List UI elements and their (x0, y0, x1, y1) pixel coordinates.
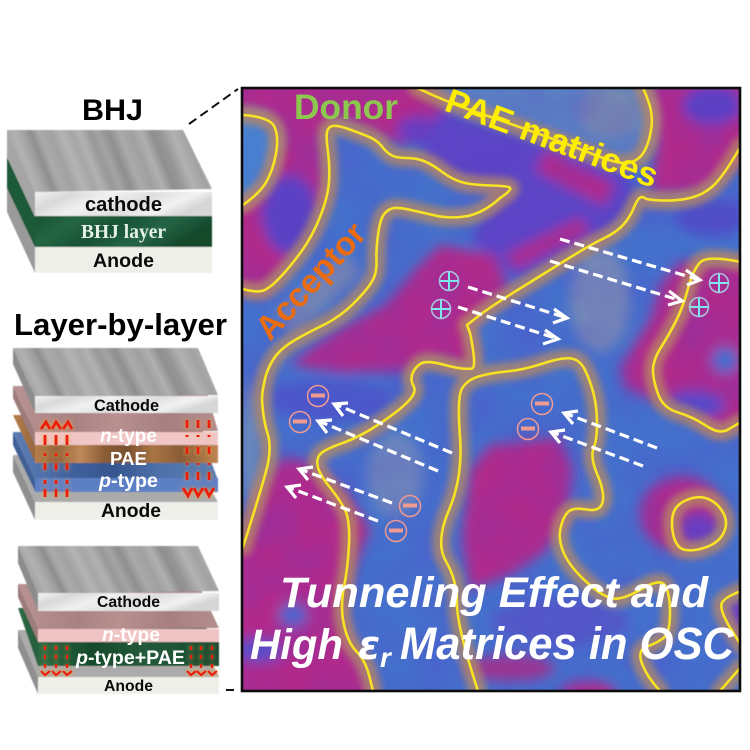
title: Tunneling Effect and High εr Matrices in OSC: Matrices in OSC (400, 618, 735, 669)
arrows: hole transport (458, 239, 700, 344)
icons: positive charges (432, 272, 728, 318)
heading: Layer-by-layer: Layer-by-layer (14, 307, 227, 342)
label: Cathode: Cathode (94, 397, 159, 415)
panel frame (242, 88, 740, 691)
contour glow (243, 88, 741, 691)
arrows: left charge transport (41, 646, 72, 675)
label: Donor: Donor (294, 88, 398, 127)
label: Cathode: Cathode (97, 594, 160, 611)
arrows: upward charge transport (41, 422, 72, 497)
label: p-type+PAE: p-type+PAE (75, 648, 185, 669)
arrows: downward charge transport (183, 420, 214, 496)
label: n-type: n-type (102, 625, 160, 646)
title: Tunneling Effect and High εr Matrices in OSC: ε (358, 623, 380, 669)
label: Anode: Anode (104, 678, 153, 695)
device: layer-by-layer layers (13, 348, 218, 520)
panel: morphology map (230, 75, 750, 705)
label: cathode: cathode (85, 194, 162, 216)
label: Anode: Anode (101, 501, 161, 522)
icons: negative charges (290, 386, 552, 542)
arrows: right charge transport (187, 646, 217, 675)
title: Tunneling Effect and High εr Matrices in OSC: High (250, 621, 343, 669)
PAE matrix contour lines (243, 88, 741, 691)
panel: Layer-by-layer device stack (13, 307, 227, 522)
device: BHJ layers (7, 130, 212, 273)
heading: BHJ: BHJ (82, 94, 143, 127)
label: n-type: n-type (100, 426, 157, 447)
title: Tunneling Effect and High εr Matrices in OSC: Tunneling Effect and (280, 569, 709, 617)
dashed zoom connector: bottom (226, 689, 238, 691)
label: Acceptor: Acceptor (249, 216, 374, 347)
label: PAE: PAE (110, 449, 147, 469)
panel: blend device stack (18, 546, 219, 695)
label: p-type: p-type (98, 470, 158, 492)
device: blend layers (18, 546, 219, 694)
title: Tunneling Effect and High εr Matrices in OSC: r (380, 642, 393, 673)
title: Tunneling Effect and High εr Matrices in OSC (250, 569, 735, 673)
mottled texture (242, 88, 740, 691)
dashed zoom connector: top (189, 89, 238, 124)
label: Anode: Anode (93, 250, 154, 272)
label: BHJ layer: BHJ layer (81, 222, 166, 243)
map background (230, 75, 750, 705)
label: PAE matrices: PAE matrices (440, 82, 663, 196)
panel: BHJ device stack (7, 94, 212, 273)
arrows: electron transport (287, 403, 657, 521)
